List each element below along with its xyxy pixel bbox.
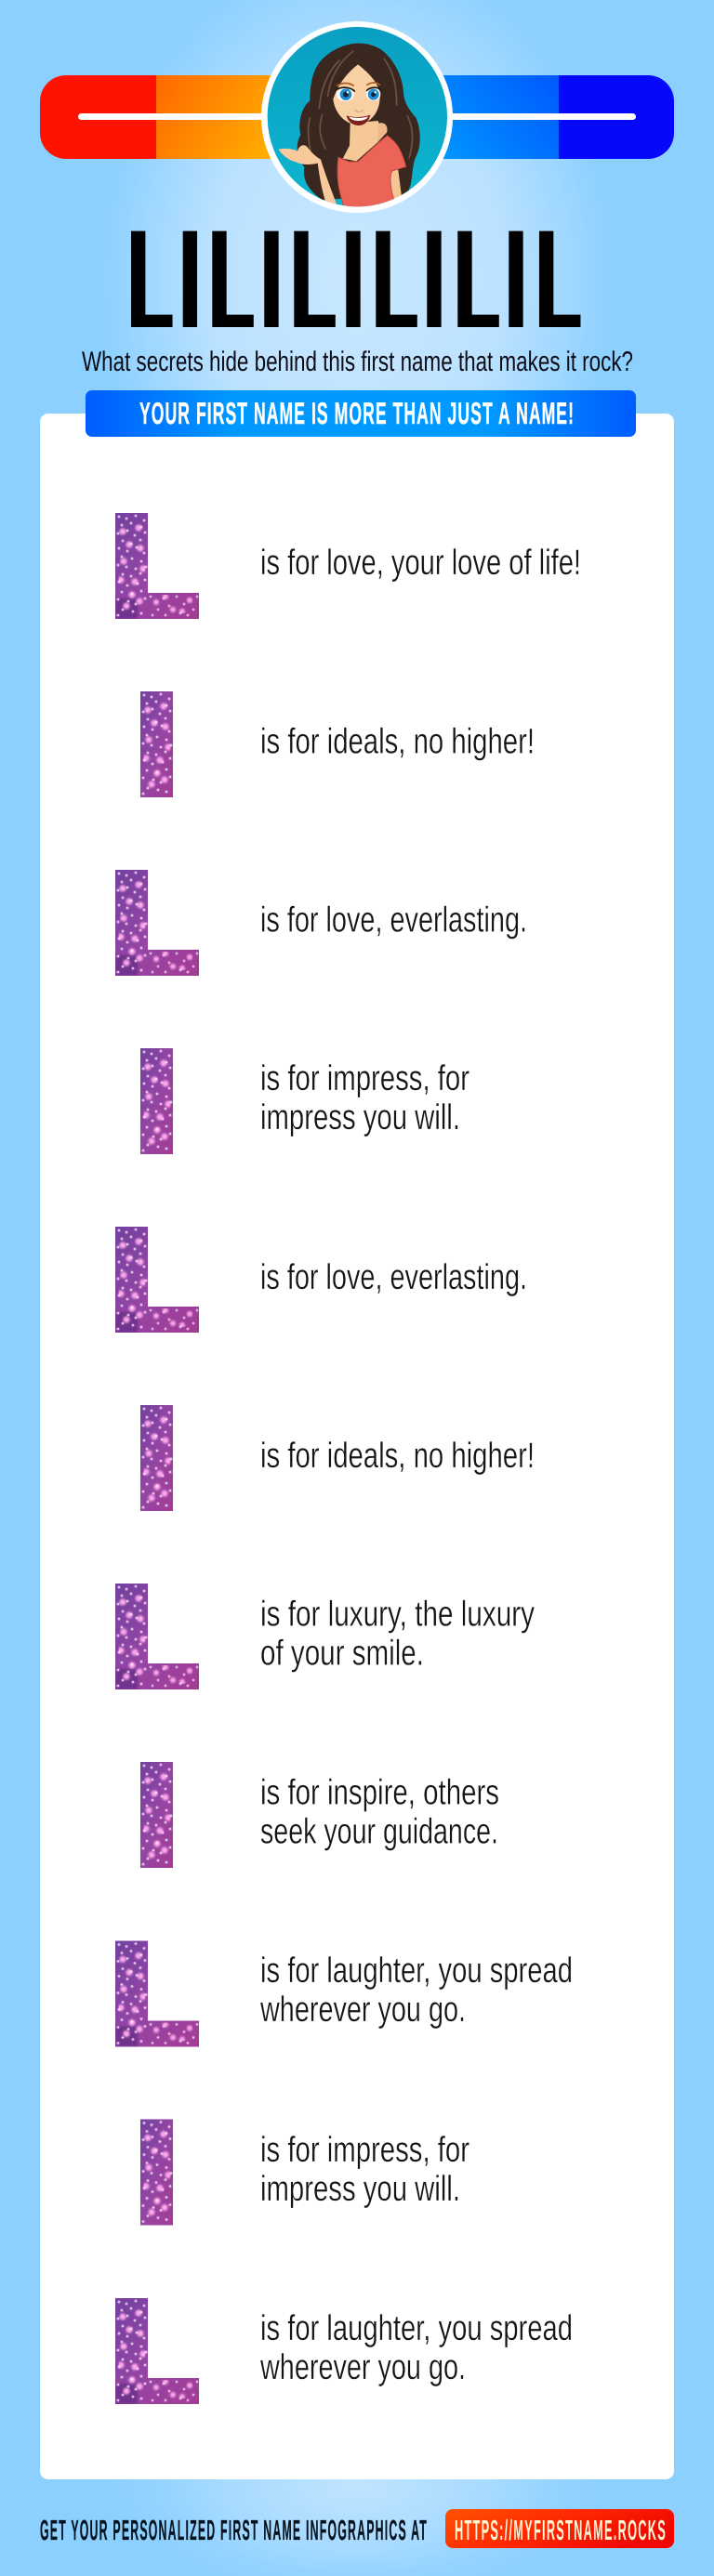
bar segment: dark blue bbox=[559, 75, 674, 159]
title: LILILILILIL bbox=[128, 199, 581, 361]
banner bbox=[86, 390, 636, 437]
row text: is for impress, for bbox=[260, 2130, 469, 2170]
icon: glitter I bbox=[140, 2119, 173, 2225]
top bbox=[337, 136, 406, 207]
row 11: L bbox=[115, 2298, 573, 2404]
row text: is for inspire, others bbox=[260, 1773, 499, 1812]
row text: is for impress, for bbox=[260, 1058, 469, 1098]
icon: glitter L bbox=[115, 1227, 199, 1333]
icon: glitter I bbox=[140, 1048, 173, 1154]
row text: wherever you go. bbox=[259, 1990, 466, 2030]
row 6: I bbox=[140, 1405, 535, 1511]
icon: glitter L bbox=[115, 870, 199, 976]
white content panel bbox=[40, 414, 674, 2479]
bar segment: orange bbox=[156, 75, 286, 159]
avatar ring bbox=[261, 21, 453, 213]
mouth bbox=[347, 115, 370, 125]
icon: glitter I bbox=[140, 691, 173, 797]
row 5: L bbox=[115, 1227, 527, 1333]
row 7: L bbox=[115, 1584, 536, 1689]
footer bbox=[40, 2509, 674, 2548]
row text: wherever you go. bbox=[259, 2347, 466, 2387]
avatar portrait bbox=[261, 21, 453, 213]
row 2: I bbox=[140, 691, 535, 797]
eyebrows bbox=[337, 83, 379, 85]
face bbox=[333, 64, 380, 125]
row text: is for luxury, the luxury bbox=[260, 1595, 536, 1634]
left arm and hand bbox=[278, 145, 337, 207]
icon: glitter L bbox=[115, 513, 199, 619]
bar segment: red bbox=[40, 75, 156, 159]
row text: is for ideals, no higher! bbox=[260, 1436, 535, 1476]
right arm bbox=[387, 169, 402, 202]
row text bbox=[259, 2308, 573, 2387]
banner background bbox=[86, 390, 636, 437]
neck bbox=[343, 121, 382, 161]
row text: of your smile. bbox=[260, 1634, 424, 1673]
icon: glitter L bbox=[115, 1940, 199, 2046]
white line bbox=[78, 113, 636, 120]
icon: glitter I bbox=[140, 1762, 173, 1868]
illustration: woman bbox=[268, 27, 447, 207]
row 3: L bbox=[115, 870, 527, 976]
row text: is for love, everlasting. bbox=[260, 1257, 527, 1297]
row 8: I bbox=[140, 1762, 499, 1868]
icon: glitter L bbox=[115, 2298, 199, 2404]
row text bbox=[260, 1595, 536, 1673]
row 9: L bbox=[115, 1940, 573, 2046]
row text: is for laughter, you spread bbox=[260, 2308, 573, 2348]
row text: is for love, everlasting. bbox=[260, 900, 527, 940]
url button bbox=[445, 2509, 674, 2548]
row 10: I bbox=[140, 2119, 469, 2225]
row text: impress you will. bbox=[260, 2169, 460, 2209]
row text bbox=[260, 1058, 469, 1137]
row text bbox=[260, 2130, 469, 2209]
header colour bar bbox=[40, 75, 674, 159]
row text bbox=[260, 1773, 499, 1851]
hair bbox=[298, 44, 420, 200]
row 1: L bbox=[115, 513, 581, 619]
row text: impress you will. bbox=[260, 1097, 460, 1137]
row text: seek your guidance. bbox=[260, 1812, 498, 1851]
icon: glitter I bbox=[140, 1405, 173, 1511]
bar segment: blue bbox=[428, 75, 559, 159]
eyes bbox=[337, 87, 354, 101]
nose bbox=[355, 110, 364, 112]
row text: is for laughter, you spread bbox=[260, 1951, 573, 1991]
row 4: I bbox=[140, 1048, 469, 1154]
row text: is for ideals, no higher! bbox=[260, 721, 535, 762]
row text: is for love, your love of life! bbox=[260, 543, 581, 583]
row text bbox=[259, 1951, 573, 2030]
icon: glitter L bbox=[115, 1584, 199, 1689]
